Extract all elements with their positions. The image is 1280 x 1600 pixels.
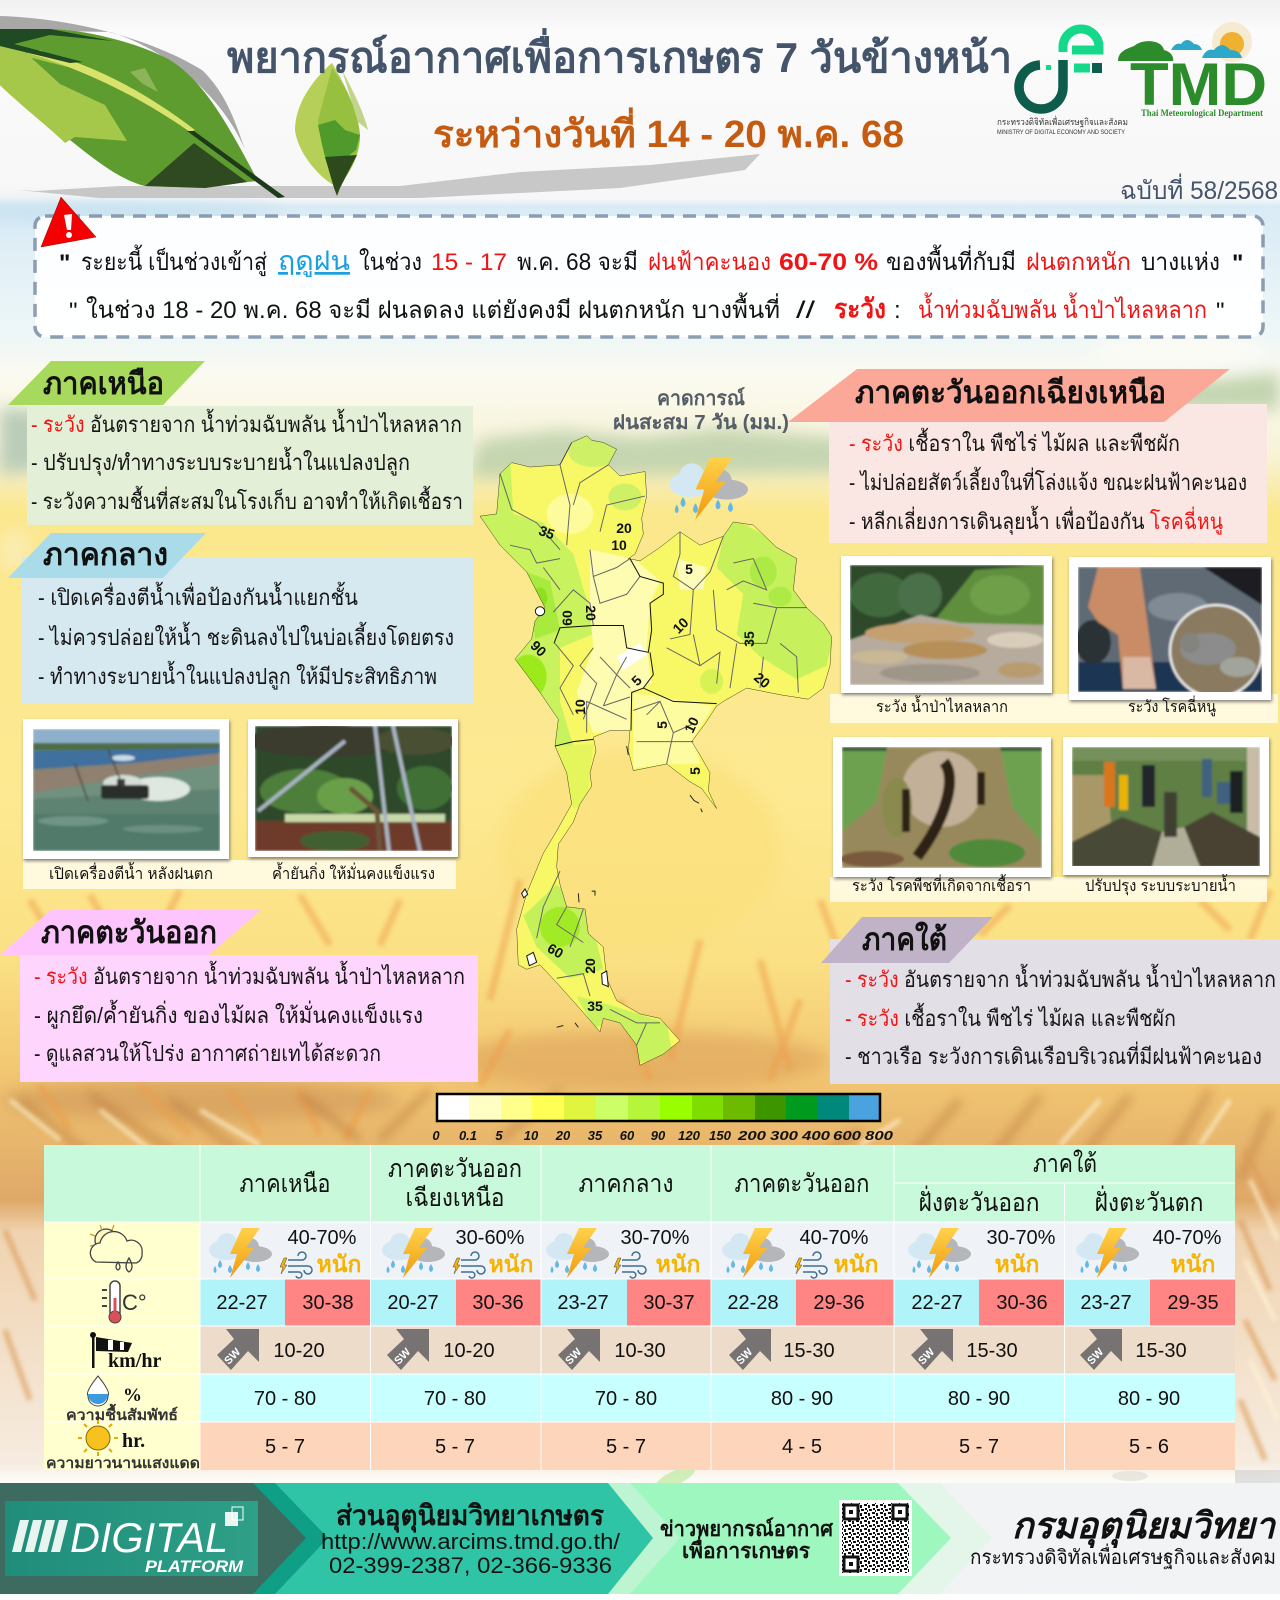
- east advice lines: - ดูแลสวนให้โปร่ง อากาศถ่ายเทได้สะดวก: [34, 1041, 381, 1067]
- row: rain chance: 30-70%: [621, 1227, 690, 1249]
- title: พยากรณ์อากาศเพื่อการเกษตร 7 วันข้างหน้า: [227, 28, 1012, 81]
- footer: agromet division: 02-399-2387, 02-366-9336: [329, 1553, 612, 1578]
- alert line 2: ในช่วง 18 - 20 พ.ค. 68 จะมี ฝนลดลง แต่ยังคงมี ฝนตกหนัก บางพื้นที่: [86, 292, 780, 324]
- legend labels: [432, 1128, 894, 1143]
- map rainfall labels: 20: [583, 605, 599, 621]
- legend labels: 0.1: [459, 1128, 477, 1143]
- captions: [852, 695, 1236, 896]
- row: wind: 10-20: [443, 1340, 495, 1362]
- row: wind: 10-30: [614, 1340, 666, 1362]
- footer: department name: [970, 1505, 1277, 1569]
- icon: thermometer: C°: [122, 1290, 147, 1315]
- heading: south: [821, 917, 993, 963]
- north advice lines: [31, 409, 463, 514]
- map rainfall labels: 60: [559, 610, 575, 626]
- row: wind: 15-30: [783, 1340, 835, 1362]
- map rainfall labels: 10: [611, 537, 627, 553]
- map rainfall labels: 10: [572, 699, 588, 715]
- alert line 1: ระยะนี้ เป็นช่วงเข้าสู่: [81, 244, 267, 277]
- captions: ระวัง น้ำป่าไหลหลาก: [876, 695, 1008, 716]
- legend labels: 400: [801, 1128, 831, 1143]
- captions: ระวัง โรคพืชที่เกิดจากเชื้อรา: [852, 874, 1031, 895]
- row: rain chance: 40-70%: [1153, 1227, 1222, 1249]
- row: temperature: 29-36: [813, 1292, 865, 1314]
- legend labels: 200: [737, 1128, 767, 1143]
- map title: คาดการณ์: [657, 387, 745, 410]
- panel: northeast region advice: [788, 369, 1267, 543]
- logo: Thai Meteorological Department: Thai Meteorological Department: [1141, 108, 1263, 118]
- panel: east region advice: [0, 910, 478, 1082]
- heading: central: ภาคกลาง: [43, 537, 168, 572]
- legend labels: 5: [495, 1128, 503, 1143]
- logo: Thai Meteorological Department: TMD: [1130, 51, 1267, 118]
- heading: east: ภาคตะวันออก: [41, 915, 217, 950]
- south advice lines: [845, 964, 1276, 1069]
- heading: south: ภาคใต้: [862, 921, 947, 957]
- row: sunshine: 5 - 7: [606, 1436, 646, 1458]
- row: sunshine: 4 - 5: [782, 1436, 822, 1458]
- row: humidity: 80 - 90: [948, 1388, 1010, 1410]
- map rainfall labels: 20: [751, 669, 773, 691]
- map rainfall labels: 10: [669, 614, 692, 637]
- north advice lines: - ระวังความชื้นที่สะสมในโรงเก็บ อาจทำให้เกิดเชื้อรา: [31, 486, 463, 514]
- legend labels: 600: [833, 1128, 862, 1143]
- row: rain chance: 40-70%: [288, 1227, 357, 1249]
- alert line 1: ": [1232, 250, 1243, 277]
- north advice lines: - ปรับปรุง/ทำทางระบบระบายน้ำในแปลงปลูก: [31, 447, 410, 476]
- heading: northeast: [788, 369, 1230, 422]
- photo: aerator in pond: [23, 719, 229, 859]
- row: rain chance: หนัก: [1171, 1251, 1215, 1277]
- digital platform logo: [5, 1501, 258, 1576]
- photo: flash flood: [841, 556, 1052, 693]
- row: temperature: 30-38: [302, 1292, 354, 1314]
- map rainfall labels: 10: [681, 714, 702, 735]
- icon: wind sock: km/hr: [108, 1350, 161, 1372]
- legend labels: 300: [770, 1128, 799, 1143]
- icon: sun: hr.: [122, 1430, 145, 1452]
- map rainfall labels: 5: [628, 672, 645, 689]
- row: rain chance: 30-70%: [987, 1227, 1056, 1249]
- map title: [613, 387, 789, 434]
- header row: [240, 1149, 1204, 1217]
- digital platform logo: DIGITAL: [70, 1514, 228, 1561]
- central advice lines: - ไม่ควรปล่อยให้น้ำ ชะดินลงไปในบ่อเลี้ยงโดยตรง: [38, 622, 454, 650]
- footer banner: [0, 1483, 1280, 1594]
- row: humidity: 80 - 90: [771, 1388, 833, 1410]
- heading: north: ภาคเหนือ: [43, 366, 164, 401]
- northeast advice lines: - ระวัง เชื้อราใน พืชไร่ ไม้ผล และพืชผัก: [849, 428, 1180, 456]
- row: sunshine: 5 - 6: [1129, 1436, 1169, 1458]
- logo: digital economy ministry: [997, 29, 1128, 136]
- legend labels: 60: [620, 1128, 635, 1143]
- central advice lines: [38, 582, 454, 690]
- photo: root rot on tree: [833, 737, 1051, 877]
- footer: news label: เพื่อการเกษตร: [682, 1535, 811, 1563]
- captions: เปิดเครื่องตีน้ำ หลังฝนตก: [49, 862, 213, 883]
- panel: central photos: ค้ำยันกิ่ง ให้มั่นคงแข็งแรง: [272, 862, 435, 883]
- panel: north region advice: [8, 361, 473, 525]
- logo: Thai Meteorological Department: [1118, 22, 1267, 118]
- captions: ระวัง โรคฉี่หนู: [1128, 695, 1216, 717]
- row: humidity: 70 - 80: [424, 1388, 486, 1410]
- map rainfall labels: 35: [537, 522, 557, 543]
- map rainfall labels: 20: [582, 958, 598, 974]
- heading: north: [8, 361, 205, 405]
- row: temperature: 22-27: [911, 1292, 963, 1314]
- alert line 1: ฤดูฝน: [278, 246, 350, 277]
- row: humidity: 70 - 80: [254, 1388, 316, 1410]
- map rainfall labels: 5: [654, 721, 670, 729]
- alert line 1: พ.ค. 68 จะมี: [517, 249, 638, 276]
- heading: northeast: ภาคตะวันออกเฉียงเหนือ: [855, 375, 1166, 410]
- digital platform logo: PLATFORM: [145, 1557, 244, 1576]
- row: rain chance: หนัก: [489, 1251, 533, 1277]
- footer: agromet division: ส่วนอุตุนิยมวิทยาเกษตร: [336, 1500, 604, 1533]
- map rainfall labels: 90: [527, 637, 550, 660]
- row: rain chance: 40-70%: [800, 1227, 869, 1249]
- row: rain chance: หนัก: [995, 1251, 1039, 1277]
- row: rain chance: หนัก: [834, 1251, 878, 1277]
- row: wind: 10-20: [273, 1340, 325, 1362]
- map rainfall labels: 60: [545, 940, 566, 962]
- photo: drainage clearing: [1063, 737, 1269, 875]
- alert line 1: ในช่วง: [359, 248, 422, 276]
- logo: digital economy ministry: กระทรวงดิจิทัลเพื่อเศรษฐกิจและสังคม: [997, 115, 1128, 128]
- header row: ภาคกลาง: [578, 1170, 674, 1198]
- heading: east: [0, 910, 261, 955]
- row: wind: 15-30: [1135, 1340, 1187, 1362]
- map rainfall labels: 5: [687, 767, 703, 775]
- header leaves illustration: [0, 16, 760, 198]
- row: rain chance: หนัก: [317, 1251, 361, 1277]
- row: temperature: 30-36: [472, 1292, 524, 1314]
- row: rain chance: [90, 1225, 1222, 1278]
- east advice lines: [34, 961, 465, 1067]
- panel: central region advice: [8, 533, 473, 704]
- legend labels: 35: [588, 1128, 603, 1143]
- table row fills: [44, 1145, 1235, 1470]
- icon: thermometer: [102, 1281, 147, 1323]
- footer: agromet division: http://www.arcims.tmd.go.th/: [321, 1529, 621, 1554]
- footer: department name: กรมอุตุนิยมวิทยา: [1012, 1505, 1277, 1548]
- icon: warning triangle: [41, 197, 96, 247]
- map title: ฝนสะสม 7 วัน (มม.): [613, 412, 789, 434]
- legend labels: 0: [432, 1128, 440, 1143]
- northeast advice lines: - หลีกเลี่ยงการเดินลุยน้ำ เพื่อป้องกัน โรคฉี่หนู: [849, 506, 1223, 535]
- panel: alert box: [35, 216, 1263, 337]
- alert line 1: ฝนฟ้าคะนอง: [648, 249, 771, 276]
- alert line 1: ฝนตกหนัก: [1026, 249, 1131, 276]
- row: temperature: 23-27: [557, 1292, 609, 1314]
- legend labels: 150: [709, 1128, 732, 1143]
- alert line 1: 60-70 %: [779, 249, 878, 276]
- icon: sun: ความยาวนานแสงแดด: [46, 1455, 200, 1472]
- alert line 1: บางแห่ง: [1141, 249, 1220, 276]
- header row: ภาคเหนือ: [240, 1170, 330, 1198]
- QR code: [839, 1500, 912, 1576]
- header row: ภาคใต้: [1033, 1149, 1097, 1178]
- row: sunshine: 5 - 7: [265, 1436, 305, 1458]
- row: temperature: 29-35: [1167, 1292, 1219, 1314]
- faint footer leaves: [652, 1462, 1280, 1494]
- icon: humidity droplet: %: [123, 1385, 142, 1406]
- icon: sun: [46, 1420, 200, 1472]
- legend labels: 120: [678, 1128, 701, 1143]
- legend labels: 10: [524, 1128, 539, 1143]
- alert line 1: ": [59, 250, 70, 277]
- legend labels: 20: [555, 1128, 571, 1143]
- logo: digital economy ministry: MINISTRY OF DIGITAL ECONOMY AND SOCIETY: [997, 130, 1125, 136]
- central advice lines: - เปิดเครื่องตีน้ำเพื่อป้องกันน้ำแยกชั้น: [38, 582, 358, 610]
- panel: northeast photos: [830, 556, 1278, 902]
- alert line 2: [69, 292, 1225, 325]
- row: temperature: 23-27: [1080, 1292, 1132, 1314]
- map rainfall labels: 20: [616, 520, 632, 536]
- map rainfall labels: 35: [587, 998, 603, 1014]
- icon: humidity droplet: ความชื้นสัมพัทธ์: [66, 1403, 178, 1424]
- row: wind: [90, 1329, 1187, 1372]
- panel: south region advice: [821, 917, 1280, 1084]
- map rainfall labels: [527, 520, 773, 1014]
- alert line 1: 15 - 17: [431, 249, 507, 276]
- east advice lines: - ระวัง อันตรายจาก น้ำท่วมฉับพลัน น้ำป่าไหลหลาก: [34, 961, 465, 989]
- photo: leptospirosis: [1069, 557, 1271, 700]
- row: humidity: 70 - 80: [595, 1388, 657, 1410]
- row: temperature: 20-27: [387, 1292, 439, 1314]
- row: humidity: 80 - 90: [1118, 1388, 1180, 1410]
- caption strip: [23, 860, 456, 889]
- header row: เฉียงเหนือ: [406, 1184, 504, 1212]
- northeast advice lines: [849, 428, 1247, 535]
- header row: ภาคตะวันออก: [388, 1155, 522, 1183]
- row: rain chance: หนัก: [656, 1251, 700, 1277]
- alert line 2: ": [1216, 298, 1225, 325]
- header row: ฝั่งตะวันตก: [1094, 1185, 1204, 1217]
- row: wind: 15-30: [966, 1340, 1018, 1362]
- legend labels: 90: [651, 1128, 666, 1143]
- map rainfall labels: 5: [685, 561, 693, 577]
- row: sunshine: [46, 1420, 1169, 1472]
- south advice lines: - ระวัง เชื้อราใน พืชไร่ ไม้ผล และพืชผัก: [845, 1003, 1176, 1031]
- footer: news label: [660, 1517, 834, 1563]
- east advice lines: - ผูกยึด/ค้ำยันกิ่ง ของไม้ผล ให้มั่นคงแข็งแรง: [34, 1000, 423, 1029]
- footer: news label: ข่าวพยากรณ์อากาศ: [660, 1517, 834, 1541]
- icon: humidity droplet: [66, 1376, 178, 1424]
- row: humidity: [66, 1376, 1180, 1424]
- alert line 2: //: [796, 297, 815, 324]
- panel: central photos: [23, 719, 458, 889]
- legend: rainfall colour scale: [432, 1094, 894, 1143]
- row: temperature: [102, 1281, 1219, 1323]
- row: temperature: 30-37: [643, 1292, 695, 1314]
- alert line 2: ": [69, 298, 78, 325]
- alert line 2: น้ำท่วมฉับพลัน น้ำป่าไหลหลาก: [918, 292, 1207, 324]
- central advice lines: - ทำทางระบายน้ำในแปลงปลูก ให้มีประสิทธิภาพ: [38, 661, 437, 690]
- row: sunshine: 5 - 7: [435, 1436, 475, 1458]
- issue number: ฉบับที่ 58/2568: [1120, 173, 1278, 205]
- photo: propped branches: [245, 719, 458, 857]
- row: rain chance: 30-60%: [456, 1227, 525, 1249]
- alert line 1: ของพื้นที่กับมี: [886, 244, 1016, 276]
- captions: ปรับปรุง ระบบระบายน้ำ: [1085, 874, 1236, 896]
- icon: cloud and sun: [90, 1225, 142, 1272]
- table: regional forecast: [44, 1145, 1235, 1472]
- legend labels: 800: [865, 1128, 894, 1143]
- row: temperature: 22-27: [216, 1292, 268, 1314]
- subtitle: date range: ระหว่างวันที่ 14 - 20 พ.ค. 68: [433, 107, 904, 156]
- heading: central: [8, 533, 206, 578]
- map rainfall labels: 35: [741, 631, 757, 647]
- icon: thunderstorm: [669, 457, 748, 520]
- caption strips: [830, 694, 1278, 902]
- header row: ฝั่งตะวันออก: [918, 1185, 1040, 1217]
- north advice lines: - ระวัง อันตรายจาก น้ำท่วมฉับพลัน น้ำป่าไหลหลาก: [31, 409, 462, 437]
- alert line 1: [59, 244, 1243, 277]
- row: temperature: 30-36: [996, 1292, 1048, 1314]
- alert line 2: :: [894, 297, 901, 324]
- row: sunshine: 5 - 7: [959, 1436, 999, 1458]
- footer: agromet division: [321, 1500, 621, 1578]
- chart: Thailand rainfall map: [473, 436, 833, 1065]
- row: temperature: 22-28: [727, 1292, 779, 1314]
- alert line 2: ระวัง: [834, 294, 886, 324]
- header row: ภาคตะวันออก: [734, 1170, 870, 1198]
- icon: wind sock: [90, 1332, 161, 1372]
